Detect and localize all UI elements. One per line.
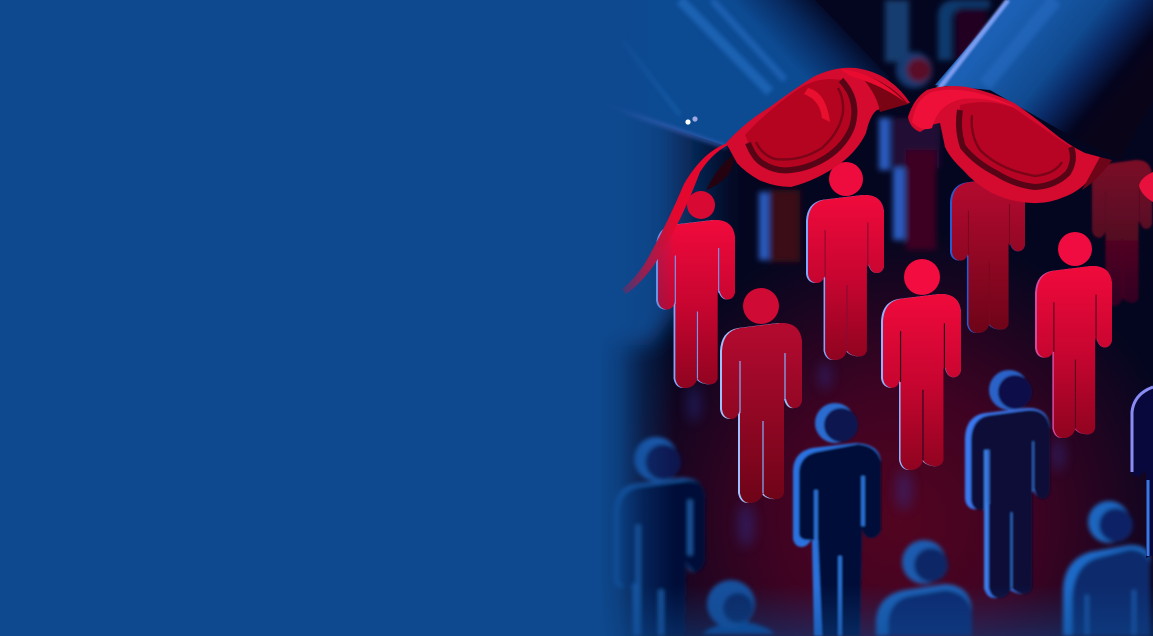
navy figure: right of centre xyxy=(965,370,1050,598)
navy figure: bottom centre xyxy=(876,540,972,636)
red figure: middle left xyxy=(720,288,802,503)
distant figures in the back row xyxy=(759,0,990,262)
glasses temple: curved red strap xyxy=(622,141,736,294)
glasses lens: left xyxy=(726,68,910,187)
back row figure: right of centre xyxy=(950,178,1025,333)
glasses arm: right xyxy=(935,0,1153,160)
photo background: dark floor xyxy=(590,0,1153,636)
back row figure: far right xyxy=(1092,160,1152,306)
navy figure: bottom left xyxy=(702,580,775,634)
red figure: upper left xyxy=(656,191,735,388)
navy figure: bottom right xyxy=(1063,501,1150,636)
red figure: upper centre xyxy=(806,162,884,360)
red figure: centre xyxy=(881,259,961,470)
glasses lens: right xyxy=(908,86,1153,203)
navy figure: right edge xyxy=(1130,385,1153,558)
red figure: right xyxy=(1035,232,1112,438)
navy figure: lower left xyxy=(613,437,705,636)
glasses arm: left xyxy=(600,0,890,147)
floor reflections under the feet xyxy=(688,362,1064,547)
navy figure: lower centre xyxy=(793,403,881,636)
